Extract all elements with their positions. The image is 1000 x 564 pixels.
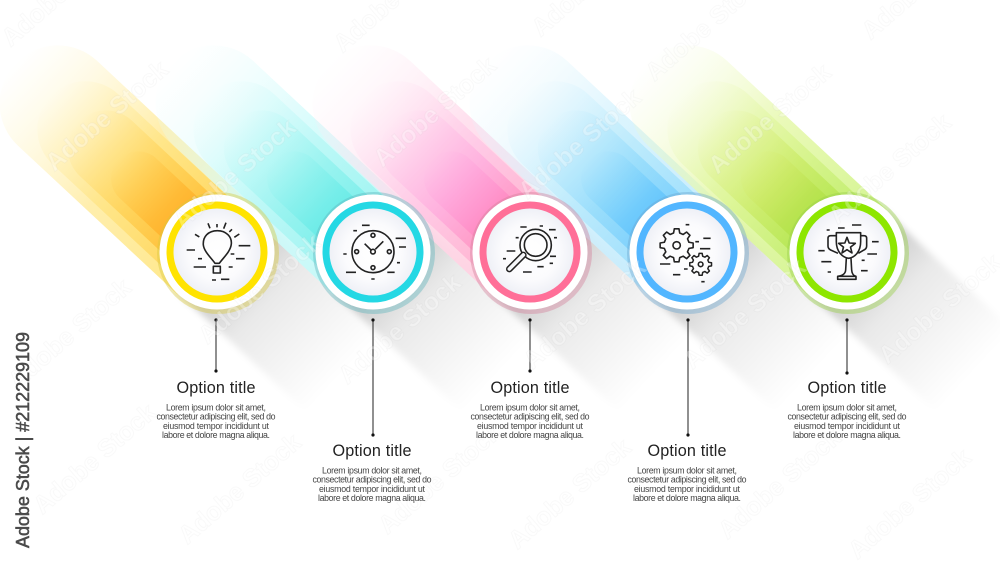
watermark pattern: Adobe Stock <box>368 51 502 173</box>
cast shadows <box>179 211 1000 412</box>
text block 4: Option title <box>648 442 726 460</box>
watermark pattern: Adobe Stock <box>3 273 137 395</box>
beam: pink <box>289 21 570 294</box>
text block 4: consectetur adipiscing elit, sed do <box>628 475 747 485</box>
beam: green <box>606 21 887 294</box>
text block 2: labore et dolore magna aliqua. <box>318 493 426 503</box>
text block 3: Option title <box>490 379 570 397</box>
text block 3 <box>470 379 590 440</box>
watermark pattern: Adobe Stock <box>193 228 327 350</box>
watermark pattern: Adobe Stock <box>503 433 637 555</box>
text block 4: labore et dolore magna aliqua. <box>633 493 741 503</box>
beam: yellow <box>0 21 257 294</box>
connector 4 <box>686 318 690 437</box>
watermark pattern: Adobe Stock <box>168 113 302 235</box>
connector 1 <box>214 318 218 373</box>
text block 2: Lorem ipsum dolor sit amet, <box>322 466 422 476</box>
watermark pattern: Adobe Stock <box>713 423 847 545</box>
text block 3: labore et dolore magna aliqua. <box>476 430 584 440</box>
icon: clock <box>343 225 406 279</box>
watermark pattern: Adobe Stock <box>333 268 467 390</box>
text block 4: Lorem ipsum dolor sit amet, <box>637 466 737 476</box>
connector 5 <box>845 318 849 375</box>
text block 2: Option title <box>332 442 412 460</box>
text block 5 <box>788 379 907 440</box>
badge: blue circle <box>627 192 749 314</box>
text block 2 <box>312 442 432 503</box>
watermark pattern: Adobe Stock <box>678 253 812 375</box>
text block 2: eiusmod tempor incididunt ut <box>319 484 426 494</box>
text block 4: eiusmod tempor incididunt ut <box>634 484 741 494</box>
beam: cyan <box>132 21 413 294</box>
watermark pattern: Adobe Stock <box>28 398 162 520</box>
text block 2: consectetur adipiscing elit, sed do <box>312 475 432 485</box>
text block 3: Lorem ipsum dolor sit amet, <box>480 402 580 412</box>
badge: cyan circle <box>313 192 435 314</box>
watermark pattern: Adobe Stock <box>513 83 647 205</box>
watermark pattern: Adobe Stock <box>40 55 174 177</box>
watermark pattern: Adobe Stock <box>703 58 837 180</box>
connector 2 <box>371 318 375 437</box>
text block 5: eiusmod tempor incididunt ut <box>794 421 901 431</box>
badge: yellow circle <box>157 192 279 314</box>
text block 5: Option title <box>808 379 886 397</box>
icon: light bulb <box>187 223 250 280</box>
text block 4 <box>628 442 747 503</box>
side stock label: Adobe Stock | #212229109 <box>13 332 33 548</box>
text block 5: consectetur adipiscing elit, sed do <box>788 412 907 422</box>
watermark pattern: Adobe Stock <box>843 443 977 564</box>
watermark pattern: Adobe Stock <box>173 428 307 550</box>
text block 1: labore et dolore magna aliqua. <box>162 430 270 440</box>
connector 3 <box>528 318 532 373</box>
text block 1: consectetur adipiscing elit, sed do <box>156 412 276 422</box>
text block 1: eiusmod tempor incididunt ut <box>163 421 270 431</box>
text block 3: eiusmod tempor incididunt ut <box>477 421 584 431</box>
badge: pink circle <box>470 192 592 314</box>
watermark pattern: Adobe Stock <box>823 108 957 230</box>
text block 1: Option title <box>176 379 256 397</box>
icon: gears <box>660 225 712 282</box>
badge: green circle <box>787 192 909 314</box>
text block 1 <box>156 379 276 440</box>
watermark pattern: Adobe Stock <box>373 418 507 540</box>
text block 5: labore et dolore magna aliqua. <box>793 430 901 440</box>
text block 1: Lorem ipsum dolor sit amet, <box>166 402 266 412</box>
text block 5: Lorem ipsum dolor sit amet, <box>797 402 897 412</box>
beam: blue <box>446 21 727 294</box>
icon: trophy <box>818 225 879 279</box>
icon: magnifying glass <box>503 226 557 272</box>
watermark pattern: Adobe Stock <box>518 253 652 375</box>
text block 3: consectetur adipiscing elit, sed do <box>470 412 590 422</box>
